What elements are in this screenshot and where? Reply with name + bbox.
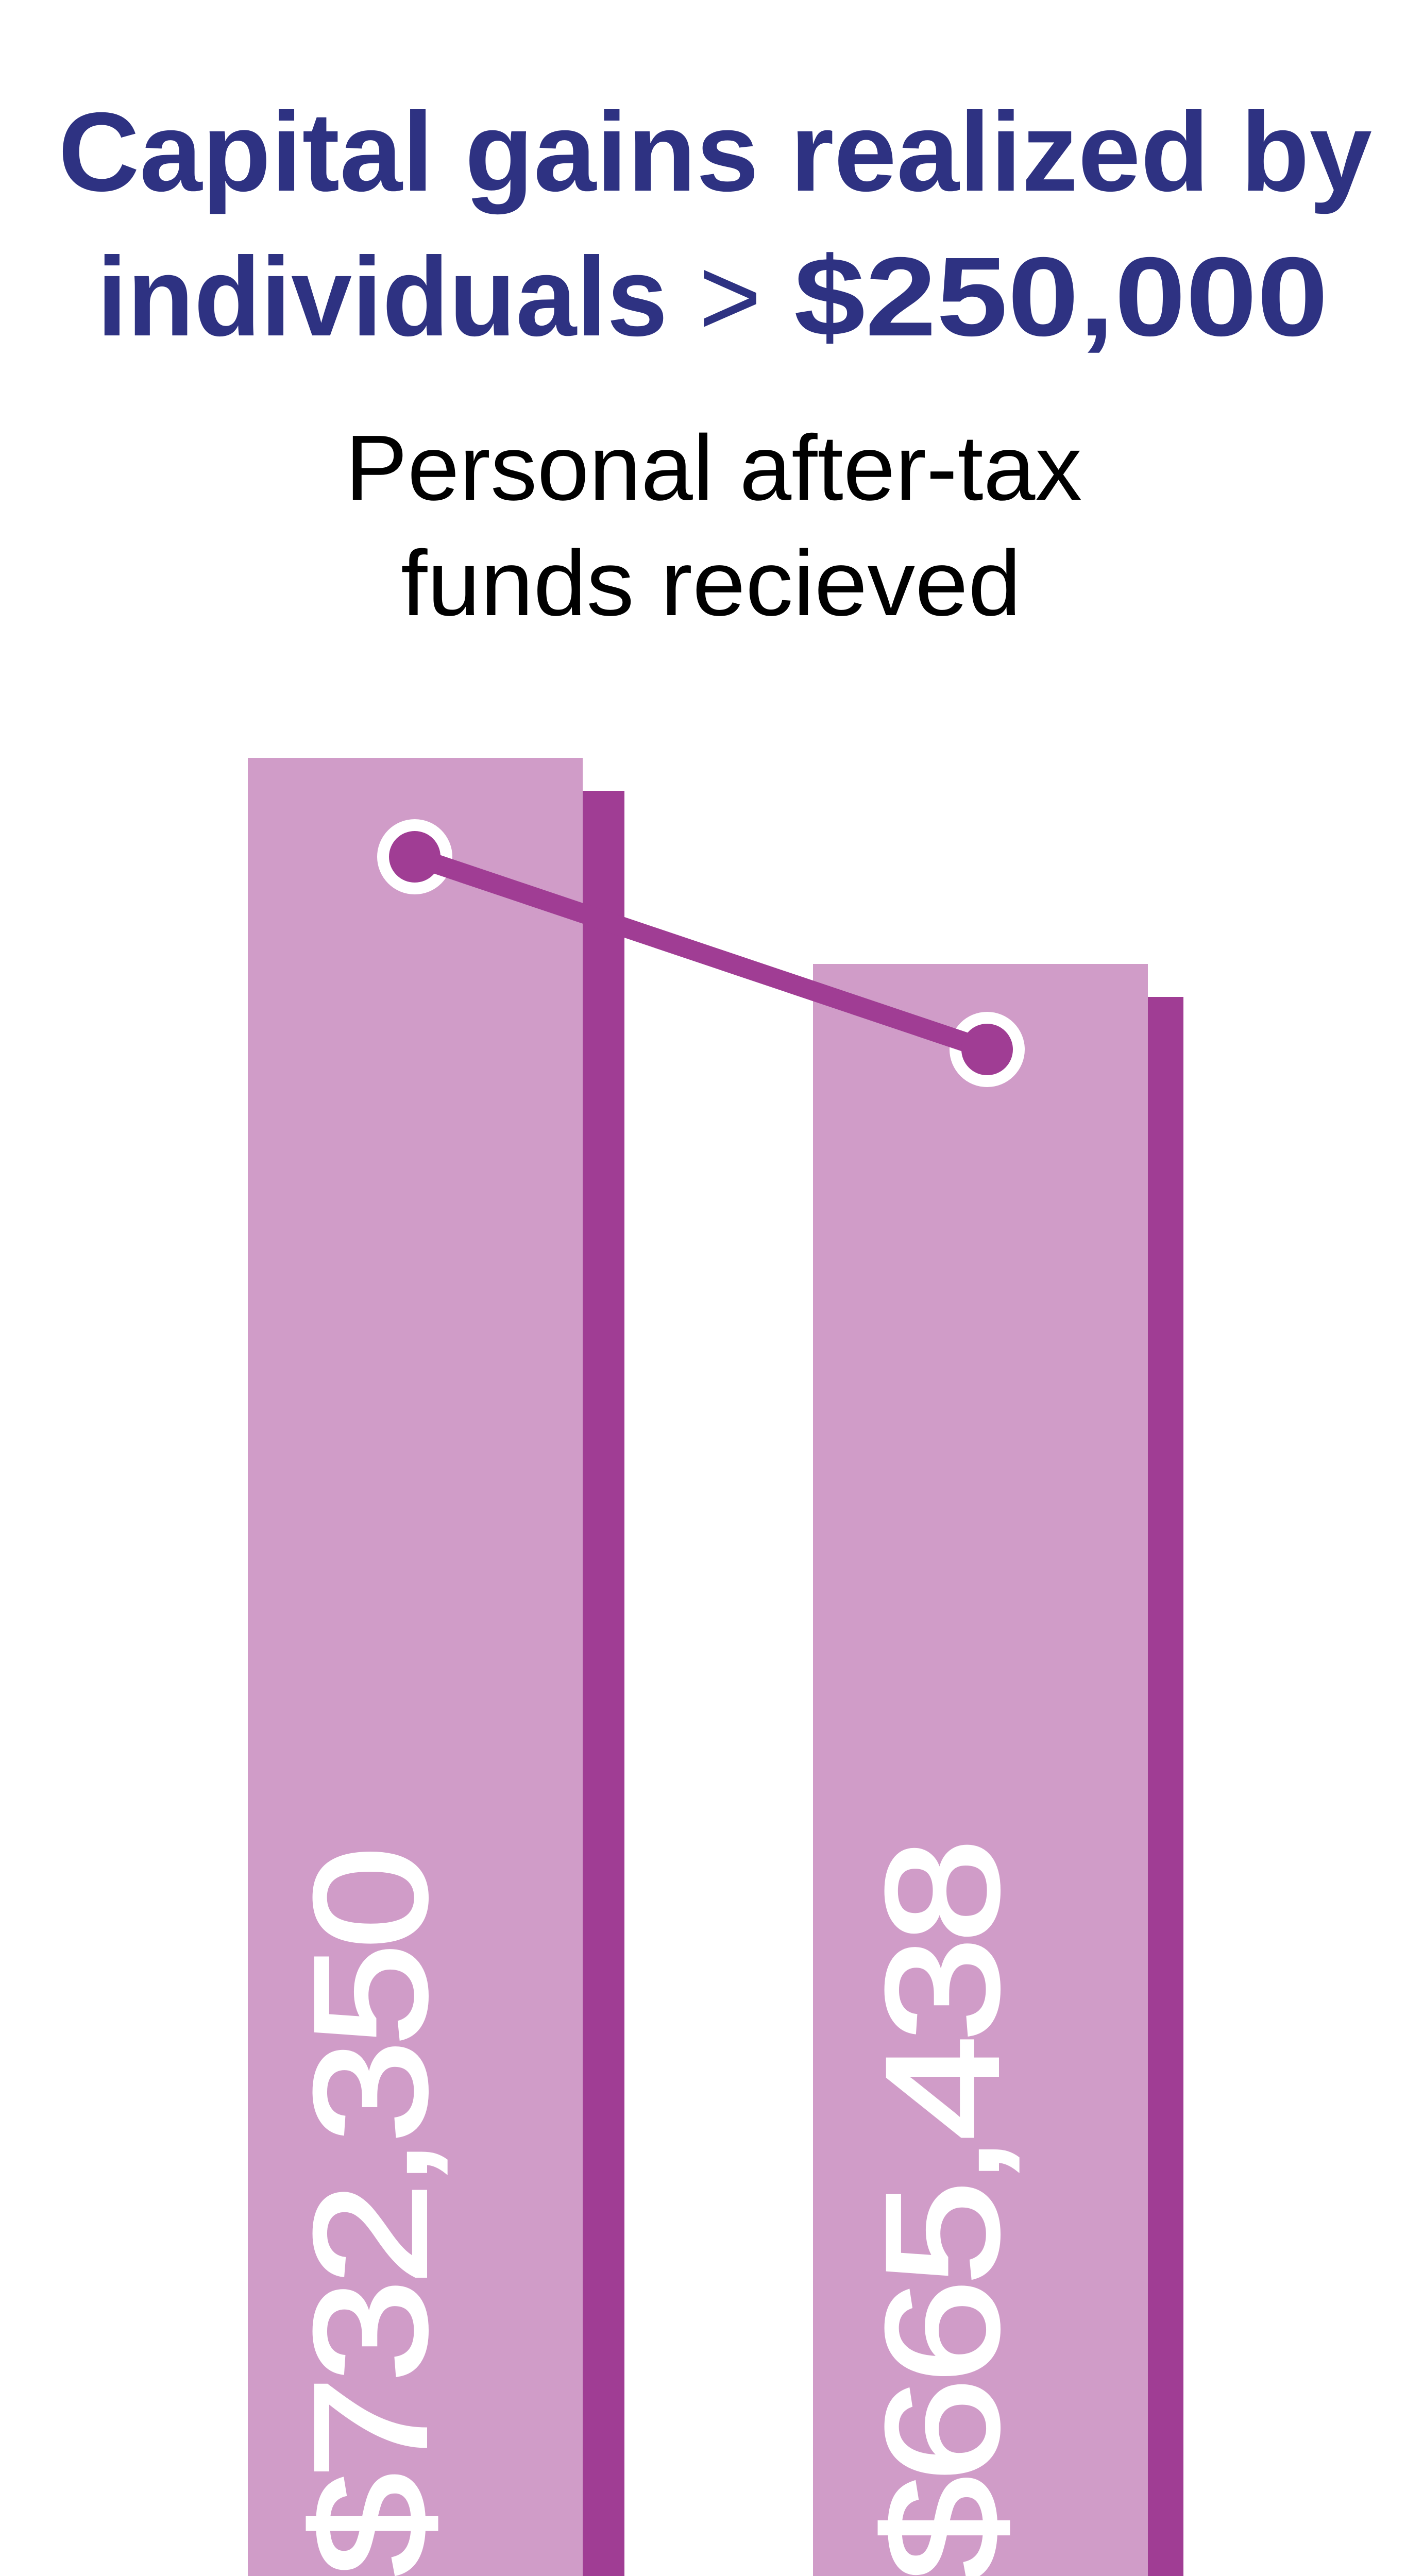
subtitle: Personal after-tax [345, 416, 1082, 520]
subtitle: funds recieved [401, 532, 1021, 635]
value label: $665,438: $665,438 [853, 1844, 1031, 2576]
bar: pre-June 25, 2024 [248, 758, 624, 2576]
bar: June 25, 2024 onwards [813, 964, 1183, 2576]
subtitle [345, 416, 1082, 635]
value label: $732,350: $732,350 [281, 1851, 460, 2576]
title: > [699, 234, 761, 360]
title [58, 90, 1372, 360]
trend line with markers [377, 819, 1025, 1087]
title: Capital gains realized by [58, 90, 1372, 215]
title: $250,000 [794, 234, 1328, 360]
title: individuals [97, 234, 668, 360]
